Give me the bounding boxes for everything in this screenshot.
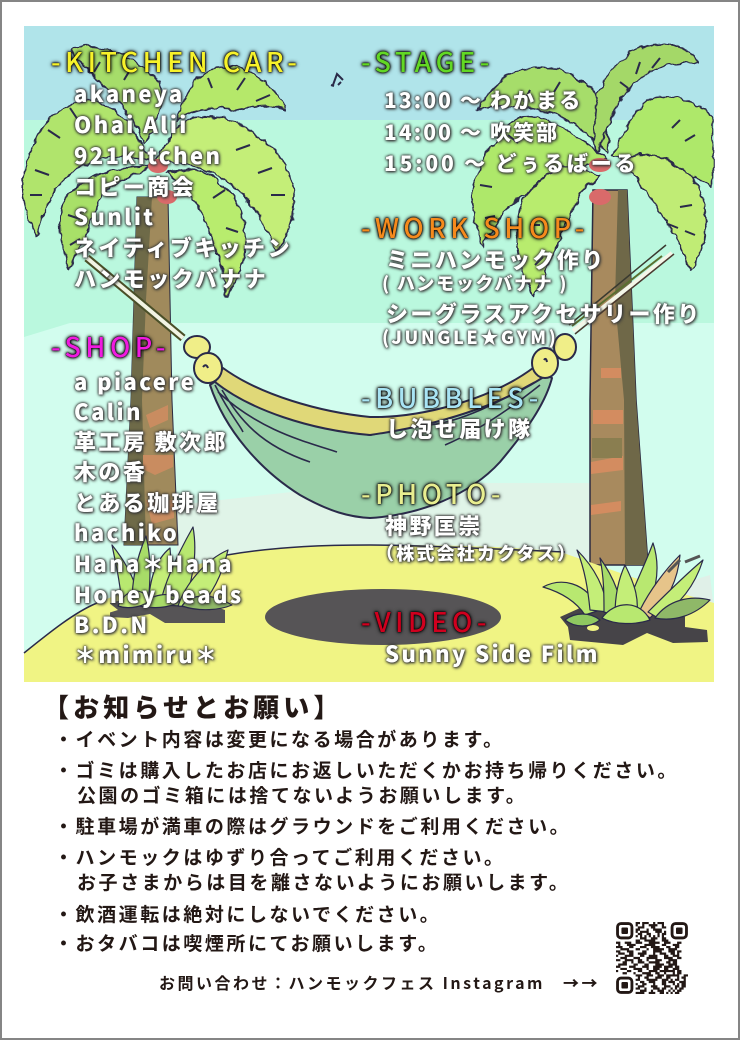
shop list: 木の香 [74,455,147,487]
heading: kitchen car: -KITCHEN CAR- [51,41,301,80]
shop list: B.D.N [74,608,150,640]
hammock ropes [87,245,674,338]
right palm trunk [590,190,648,565]
shop list: Honey beads [74,578,244,610]
notices list: ・ハンモックはゆずり合ってご利用ください。 [54,843,506,870]
notices list: ・ゴミは購入したお店にお返しいただくかお持ち帰りください。 [54,756,679,783]
shop list: Hana＊Hana [74,547,234,579]
video creator: Sunny Side Film [385,637,600,669]
heading: work shop: -WORK SHOP- [361,207,589,246]
workshop list: シーグラスアクセサリー作り [386,297,702,329]
shop list: hachiko [74,516,179,548]
notices list: ・飲酒運転は絶対にしないでください。 [54,900,441,927]
shop list: 革工房 敷次郎 [74,425,228,457]
hammock [184,334,576,518]
stage schedule: 13:00 ～ わかまる [384,85,582,115]
kitchen car vendor list: akaneya [74,77,185,109]
QR code [616,922,688,994]
left coconuts [148,159,177,204]
notices list: ・イベント内容は変更になる場合があります。 [54,725,505,752]
shop list: ＊mimiru＊ [74,638,219,670]
notices list: お子さまからは目を離さないようにお願いします。 [77,868,570,895]
heading: bubbles: -BUBBLES- [361,377,543,416]
kitchen car vendor list: 921kitchen [74,139,222,171]
panel: work shop [359,207,702,351]
bubbles performer: し泡せ届け隊 [386,412,532,444]
kitchen car vendor list: コピー商会 [74,170,196,202]
panel: notices [43,688,679,956]
right coconuts [589,158,611,205]
kitchen car vendor list: Sunlit [74,200,155,232]
left bush [100,527,232,623]
workshop list [380,243,702,351]
heading: photo: -PHOTO- [361,473,505,512]
workshop list: ミニハンモック作り [386,243,606,275]
left palm fronds [22,46,294,297]
kitchen car vendor list: ネイティブキッチン [74,231,292,263]
panel: video [360,601,600,670]
notices heading: 【お知らせとお願い】 [43,688,343,725]
icon: music note [331,74,343,86]
stage schedule: 15:00 ～ どぅるばーる [384,148,638,178]
workshop list: (JUNGLE★GYM) [382,324,558,350]
contact line: お問い合わせ：ハンモックフェス Instagram →→ [159,970,600,994]
shop list: Calin [74,395,143,427]
photographer: （株式会社カクタス） [376,540,577,566]
shop list [72,365,244,670]
heading: video: -VIDEO- [361,601,491,640]
right palm frond ticks [480,58,695,265]
panel: bubbles [359,377,543,444]
stage schedule: 14:00 ～ 吹笑部 [384,117,559,147]
photographer [376,509,577,566]
heading: shop: -SHOP- [51,326,170,365]
right bush [543,543,710,645]
panel: photo [359,473,577,566]
kitchen car vendor list [72,77,292,294]
panel: stage [359,41,638,178]
kitchen car vendor list: Ohai Alii [74,108,189,140]
stage schedule [383,85,638,178]
heading: stage: -STAGE- [361,41,494,80]
panel: shop [49,326,244,670]
notices list: ・おタバコは喫煙所にてお願いします。 [54,929,439,956]
panel: kitchen car [49,41,301,294]
hole shadow [265,589,501,645]
shop list: a piacere [74,365,196,397]
left palm trunk [124,197,178,545]
left palm frond ticks [30,62,285,245]
sky background [24,26,714,682]
kitchen car vendor list: ハンモックバナナ [74,262,268,294]
notices list: ・駐車場が満車の際はグラウンドをご利用ください。 [54,812,571,839]
ground [24,545,714,682]
notices list: 公園のゴミ箱には捨てないようお願いします。 [77,781,527,808]
photographer: 神野匡崇 [385,509,483,541]
notices list [54,725,679,956]
workshop list: ( ハンモックバナナ ) [382,270,568,296]
right palm fronds [472,44,713,297]
shop list: とある珈琲屋 [74,486,220,518]
